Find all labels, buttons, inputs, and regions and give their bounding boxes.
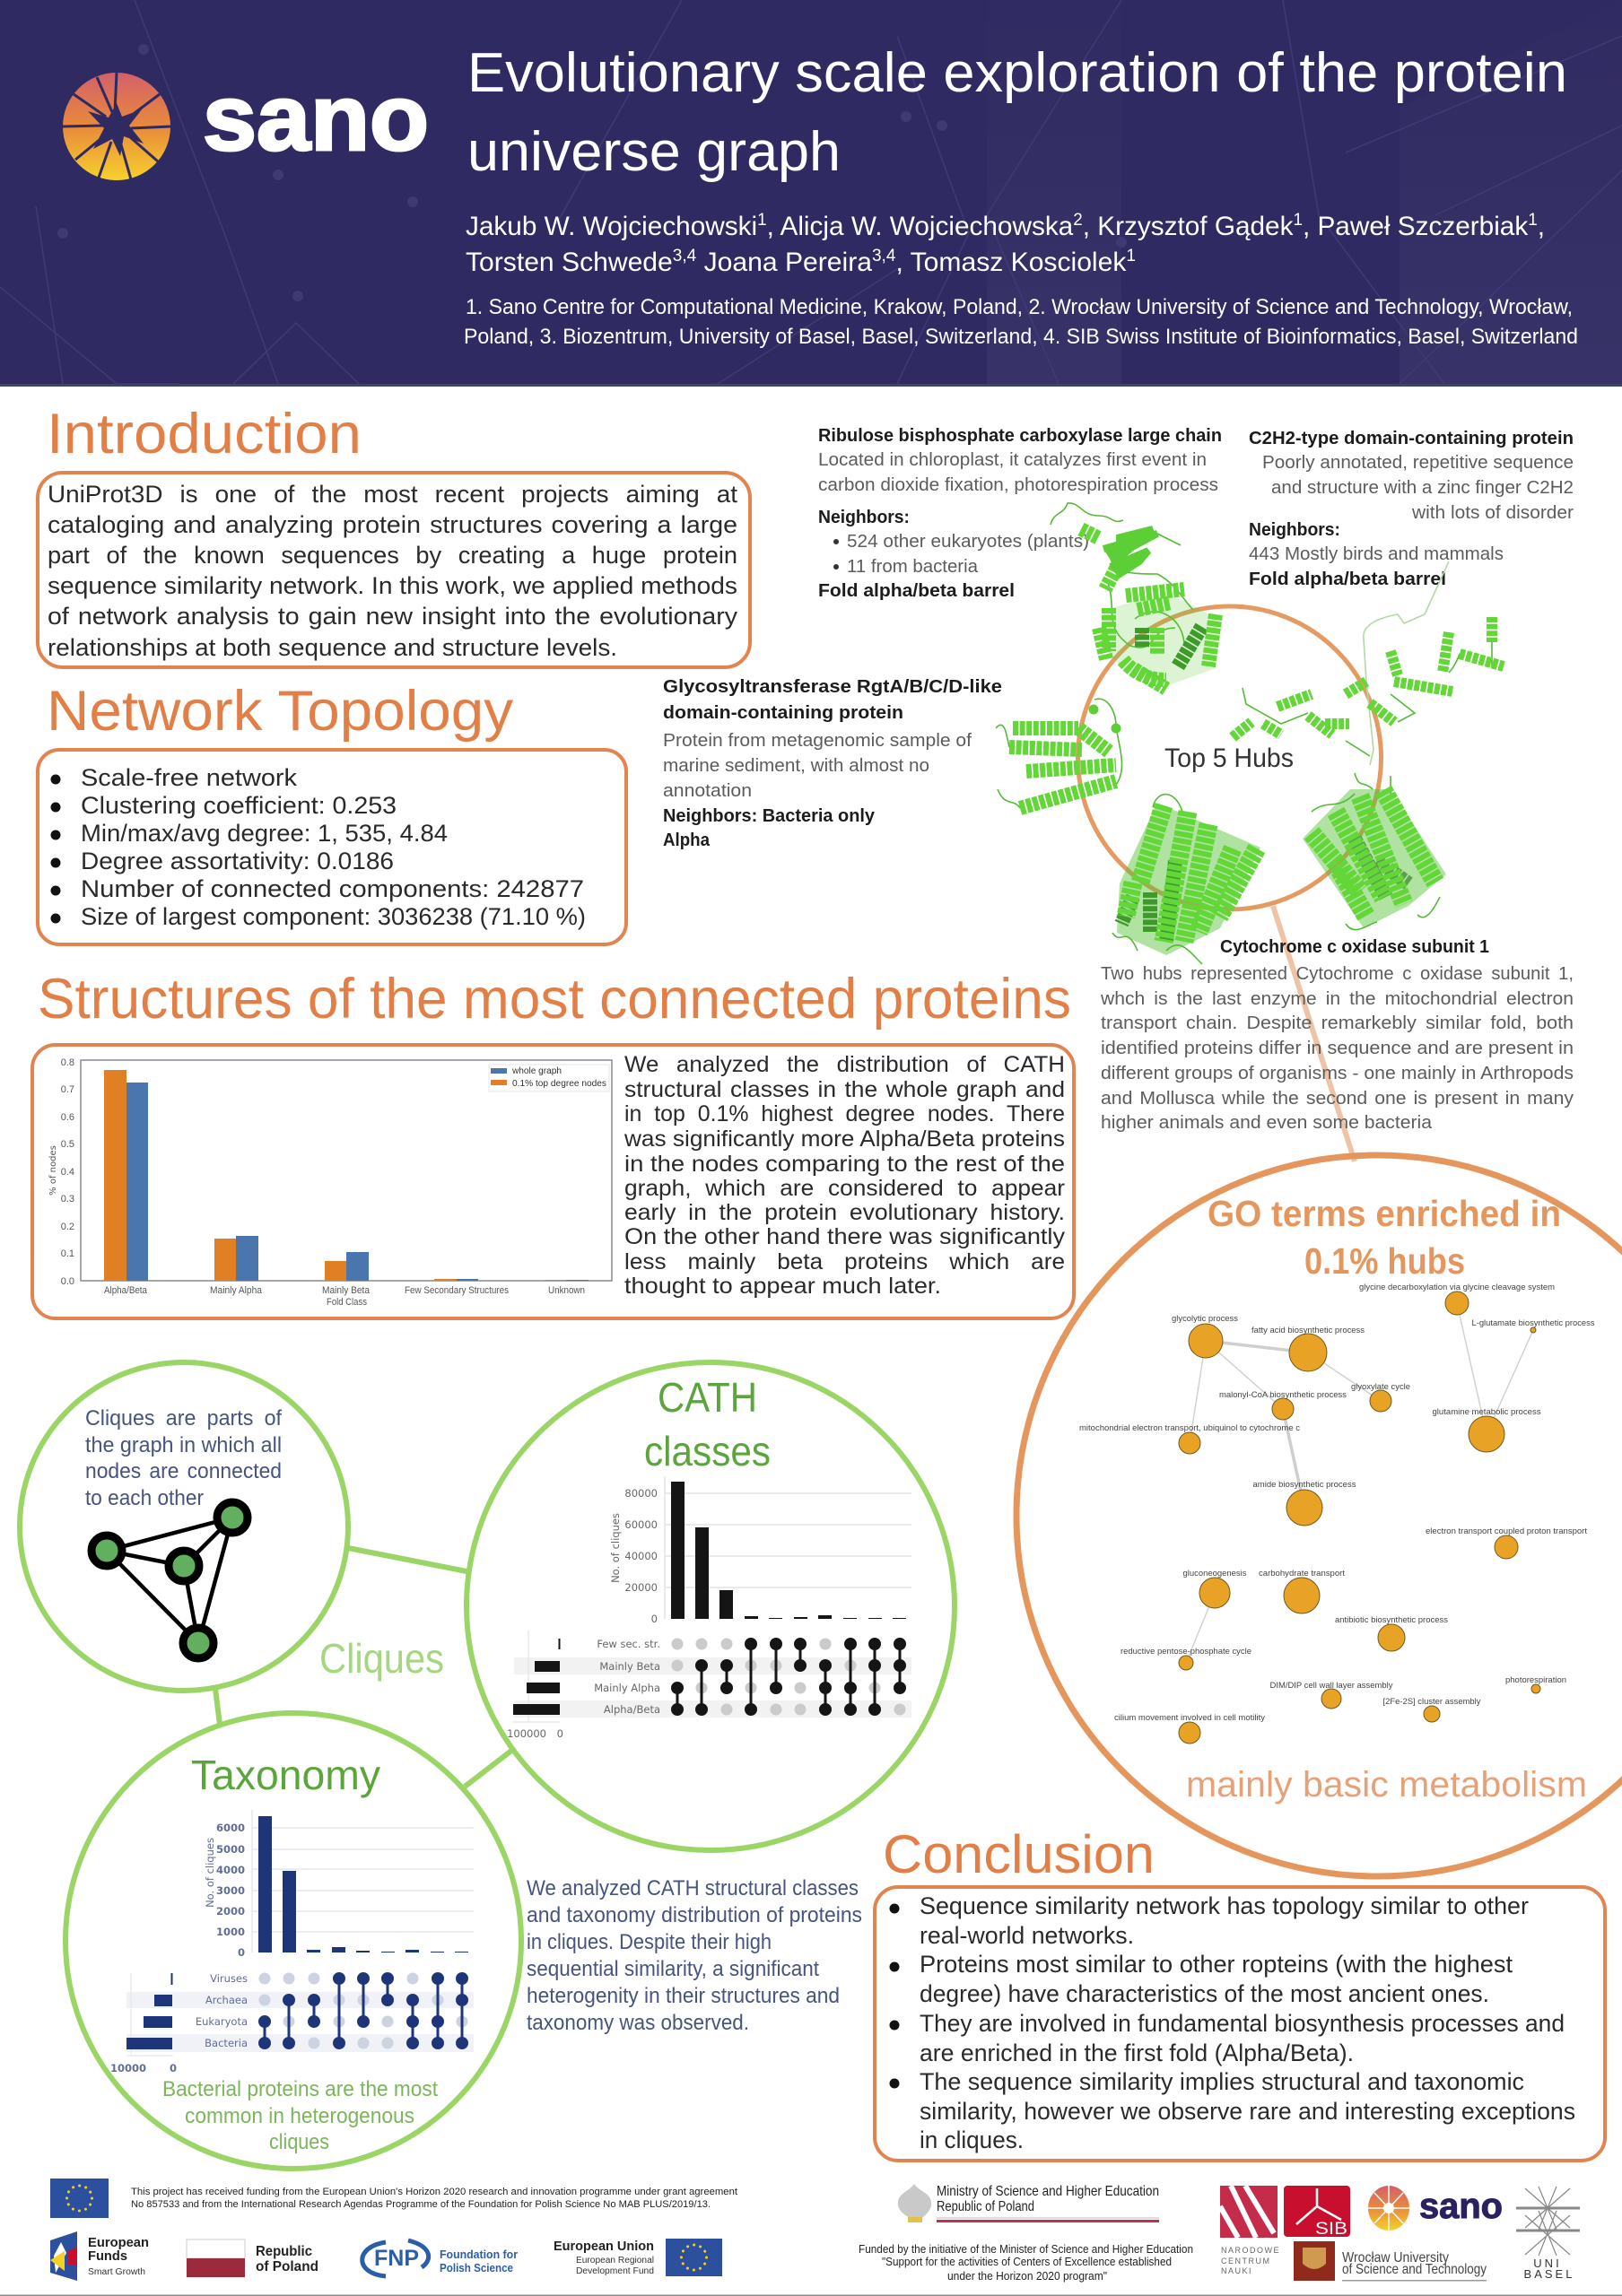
- icon: clique graph: [92, 1502, 248, 1658]
- protein: cytochrome c oxidase 1: [1112, 795, 1260, 964]
- text: Glycosyltransferase description: marine sediment, with almost no: [663, 756, 929, 776]
- text: C2H2 description: and structure with a zinc finger C2H2: [1271, 478, 1574, 498]
- network: GO term nodes: glyoxylate cycle: [1351, 1382, 1410, 1392]
- panel: conclusion: They are involved in fundamental biosynthesis processes and: [920, 2010, 1565, 2037]
- text: Glycosyltransferase description: domain-containing protein: [663, 703, 903, 723]
- text: C2H2 description: C2H2-type domain-containing protein: [1249, 429, 1574, 448]
- logo: sano: sano: [203, 66, 429, 170]
- logo: SIB: [1284, 2186, 1350, 2239]
- logo: European Union: European Union: [554, 2239, 654, 2254]
- bar chart: fold class: [48, 1057, 612, 1308]
- text: funding statement: No 857533 and from the International Research Agendas Programme of the Foundation for Polish Science No MAB PLUS/2019/13.: [131, 2199, 711, 2210]
- logo: sano small: sano: [1419, 2187, 1503, 2226]
- legend: whole graph: [511, 1066, 562, 1076]
- text: clique analysis: taxonomy was observed.: [527, 2011, 749, 2035]
- text: cytochrome c oxidase description: [1100, 937, 1574, 1133]
- circle: cliques definition: to each other: [85, 1486, 204, 1510]
- network: GO term nodes: glutamine metabolic process: [1432, 1407, 1541, 1417]
- legend: [489, 1065, 609, 1091]
- logo: European Funds: [50, 2231, 149, 2281]
- logo: FNP: Foundation for: [440, 2248, 518, 2261]
- text: Funded by statement: Funded by the initiative of the Minister of Science and Higher Education: [859, 2242, 1193, 2256]
- circle: top 5 hubs: [1078, 606, 1382, 909]
- panel: conclusion: are enriched in the first fold (Alpha/Beta).: [920, 2039, 1354, 2066]
- protein: ribulose bisphosphate carboxylase: [1051, 503, 1218, 689]
- text: C2H2 description: Neighbors:: [1249, 520, 1340, 540]
- text: Funded by statement: under the Horizon 2020 program": [947, 2269, 1107, 2283]
- connectors between clique circles: [215, 1548, 511, 1787]
- heading: Network Topology: Network Topology: [47, 680, 514, 743]
- authors: Jakub W. Wojciechowski: [466, 212, 760, 241]
- panel: introduction: [38, 473, 750, 667]
- authors: Joana Pereira: [696, 248, 872, 277]
- heading: Conclusion: Conclusion: [883, 1824, 1155, 1884]
- panel: network topology: Scale-free network: [81, 764, 298, 791]
- upset chart: taxonomy: Viruses: [210, 1972, 248, 1985]
- heading: Structures of the most connected proteins: Structures of the most connected proteins: [38, 968, 1071, 1031]
- affiliations: Poland, 3. Biozentrum, University of Basel, Basel, Switzerland, 4. SIB Swiss Institute of Bioinformatics, Basel, Switzerland: [464, 325, 1578, 349]
- network: GO term nodes: mitochondrial electron transport, ubiquinol to cytochrome c: [1079, 1423, 1300, 1433]
- logo: European Union: European Regional: [576, 2256, 654, 2266]
- text: cytochrome c oxidase description: different groups of organisms - one mainly in Arthropods: [1101, 1064, 1574, 1083]
- text: Glycosyltransferase description: Neighbors: Bacteria only: [663, 806, 876, 826]
- network: GO term nodes: DIM/DIP cell wall layer assembly: [1270, 1681, 1393, 1691]
- logo: Republic of Poland: [187, 2239, 318, 2277]
- network: GO term nodes: carbohydrate transport: [1259, 1569, 1345, 1578]
- logo: FNP: Polish Science: [440, 2261, 513, 2274]
- network: GO term nodes: gluconeogenesis: [1182, 1569, 1247, 1578]
- panel: introduction: relationships at both sequence and structure levels.: [48, 634, 617, 661]
- text: chart explanation: in top 0.1% highest degree nodes. There: [624, 1101, 1065, 1126]
- protein: cytochrome c oxidase 2: [1303, 773, 1446, 930]
- text: chart explanation: early in the protein evolutionary history.: [624, 1200, 1065, 1225]
- affiliations: 1. Sano Centre for Computational Medicine, Krakow, Poland, 2. Wrocław University of Science and Technology, Wrocław,: [466, 295, 1573, 319]
- caption: bacterial proteins: Bacterial proteins are the most: [162, 2077, 438, 2101]
- text: C2H2 description: Poorly annotated, repetitive sequence: [1262, 453, 1574, 473]
- panel: introduction: UniProt3D is one of the most recent projects aiming at: [48, 481, 738, 508]
- text: Glycosyltransferase description: [663, 677, 1002, 850]
- upset chart: taxonomy: 5000: [216, 1843, 245, 1856]
- panel: conclusion: similarity, however we observe rare and interesting exceptions: [920, 2098, 1575, 2125]
- circle: CATH classes: CATH: [658, 1374, 757, 1421]
- network: GO term nodes: electron transport coupled proton transport: [1426, 1526, 1587, 1536]
- panel: conclusion: Sequence similarity network has topology similar to other: [920, 1892, 1529, 1919]
- circle: top 5 hubs: Top 5 Hubs: [1164, 744, 1294, 773]
- authors: , Paweł Szczerbiak: [1303, 212, 1529, 241]
- upset chart: CATH: 20000: [624, 1581, 658, 1594]
- upset chart: CATH: 100000: [507, 1727, 546, 1740]
- title: universe graph: [467, 121, 841, 183]
- text: Glycosyltransferase description: Protein from metagenomic sample of: [663, 731, 972, 751]
- text: funding statement: [131, 2187, 737, 2210]
- upset chart: taxonomy: [110, 1810, 474, 2074]
- network: GO term nodes: [1079, 1283, 1595, 1744]
- connector: hubs to GO terms: [1273, 906, 1355, 1161]
- text: cytochrome c oxidase description: whch is the last enzyme in the mitochondrial electron: [1100, 989, 1574, 1009]
- circle: cliques definition: nodes are connected: [85, 1459, 282, 1483]
- panel: network topology: Clustering coefficient: 0.253: [81, 792, 397, 819]
- authors: 1: [1126, 247, 1136, 265]
- text: chart explanation: was significantly more Alpha/Beta proteins: [624, 1126, 1065, 1152]
- bar chart: fold class: 0.2: [61, 1222, 74, 1232]
- upset chart: taxonomy: Bacteria: [205, 2037, 248, 2049]
- upset chart: taxonomy: 0: [238, 1946, 245, 1959]
- upset chart: CATH: [507, 1476, 911, 1740]
- bar chart: fold class: Alpha/Beta: [104, 1285, 148, 1296]
- authors: 3,4: [673, 247, 697, 265]
- upset chart: taxonomy: 4000: [216, 1864, 245, 1876]
- text: C2H2 description: 443 Mostly birds and mammals: [1249, 544, 1504, 564]
- upset chart: taxonomy: 6000: [216, 1822, 245, 1834]
- logo: Ministry of Science and Higher Education: [898, 2184, 1159, 2222]
- logo: Narodowe Centrum Nauki: CENTRUM: [1221, 2257, 1270, 2266]
- logo: SIB: SIB: [1315, 2220, 1347, 2239]
- logo: FNP: [362, 2240, 518, 2276]
- panel: conclusion: degree) have characteristics of the most ancient ones.: [920, 1980, 1489, 2007]
- authors: , Alicja W. Wojciechowska: [767, 212, 1074, 241]
- text: clique analysis: [527, 1876, 862, 2035]
- panel: introduction: of network analysis to gain new insight into the evolutionary: [48, 603, 738, 630]
- logo: Ministry of Science and Higher Education: Republic of Poland: [937, 2199, 1034, 2214]
- logo: sano small: [1368, 2186, 1503, 2231]
- panel: conclusion: The sequence similarity implies structural and taxonomic: [920, 2068, 1524, 2095]
- text: Ribulose description: 11 from bacteria: [847, 557, 979, 577]
- text: C2H2 description: with lots of disorder: [1411, 503, 1574, 523]
- text: clique analysis: sequential similarity, a significant: [527, 1957, 819, 1981]
- text: cytochrome c oxidase description: transport chain. Despite remarkebly similar fold, both: [1101, 1013, 1574, 1033]
- network: GO term nodes: glycine decarboxylation via glycine cleavage system: [1359, 1283, 1555, 1292]
- bar chart: fold class: 0.6: [61, 1112, 74, 1123]
- text: funding statement: This project has received funding from the European Union's Horizon 2020 research and innovation programme under grant agreement: [131, 2187, 737, 2197]
- circle: cliques definition: Cliques are parts of: [85, 1406, 282, 1431]
- authors: 1: [1293, 211, 1303, 230]
- text: clique analysis: heterogenity in their structures and: [527, 1984, 840, 2008]
- authors: 1: [1528, 211, 1538, 230]
- bar chart: fold class: Mainly Alpha: [210, 1285, 263, 1296]
- text: cytochrome c oxidase description: higher animals and even some bacteria: [1101, 1113, 1433, 1133]
- upset chart: taxonomy: 10000: [110, 2062, 146, 2074]
- network: GO term nodes: [2Fe-2S] cluster assembly: [1383, 1697, 1481, 1707]
- network: GO term nodes: antibiotic biosynthetic process: [1335, 1615, 1448, 1625]
- logo: Narodowe Centrum Nauki: NAUKI: [1221, 2266, 1252, 2275]
- text: clique analysis: and taxonomy distribution of proteins: [527, 1903, 862, 1927]
- caption: bacterial proteins: cliques: [269, 2130, 329, 2154]
- upset chart: CATH: Mainly Alpha: [594, 1682, 660, 1694]
- text: chart explanation: We analyzed the distribution of CATH: [624, 1052, 1065, 1077]
- logo: Uni Basel: [1516, 2187, 1580, 2281]
- icon: sano sun: [63, 73, 170, 180]
- network: GO term nodes: photorespiration: [1505, 1675, 1566, 1685]
- bar chart: fold class: Unknown: [548, 1285, 585, 1296]
- circle: CATH classes: classes: [644, 1428, 771, 1474]
- text: Ribulose description: Ribulose bisphosphate carboxylase large chain: [818, 426, 1222, 446]
- panel: network topology: [38, 750, 626, 944]
- upset chart: CATH: 0: [651, 1613, 658, 1625]
- network: GO term nodes: malonyl-CoA biosynthetic process: [1219, 1390, 1347, 1400]
- text: C2H2 description: [1249, 429, 1574, 589]
- circle: GO terms enriched: 0.1% hubs: [1304, 1240, 1465, 1282]
- authors: 3,4: [872, 247, 896, 265]
- logo: European Union: [554, 2239, 722, 2276]
- upset chart: taxonomy: 3000: [216, 1884, 245, 1897]
- panel: network topology: Degree assortativity: 0.0186: [81, 848, 394, 874]
- logo: Narodowe Centrum Nauki: NARODOWE: [1221, 2246, 1280, 2255]
- protein: C2H2 domain: [1233, 561, 1504, 765]
- text: Ribulose description: Located in chloroplast, it catalyzes first event in: [818, 450, 1207, 470]
- panel: conclusion: [875, 1887, 1605, 2161]
- panel: conclusion: real-world networks.: [920, 1922, 1134, 1949]
- logo: Wroclaw University: of Science and Technology: [1342, 2262, 1487, 2277]
- logo: Wroclaw University: [1294, 2241, 1487, 2282]
- network: GO term nodes: amide biosynthetic process: [1252, 1480, 1356, 1490]
- logo: European Funds: European: [88, 2235, 149, 2250]
- circle: GO terms enriched: mainly basic metabolism: [1186, 1765, 1587, 1805]
- bar chart: fold class: 0.3: [61, 1194, 74, 1205]
- upset chart: CATH: No. of cliques: [609, 1513, 622, 1583]
- text: Ribulose description: Neighbors:: [818, 508, 910, 527]
- circle: GO terms enriched: GO terms enriched in: [1208, 1193, 1561, 1234]
- caption: bacterial proteins: common in heterogenous: [185, 2104, 414, 2128]
- authors: Torsten Schwede: [466, 248, 672, 277]
- legend: 0.1% top degree nodes: [512, 1079, 606, 1089]
- logo: Uni Basel: UNI: [1533, 2257, 1562, 2270]
- bar chart: fold class: 0.1: [61, 1248, 74, 1259]
- bar chart: fold class: 0.7: [61, 1084, 74, 1095]
- logo: European Funds: Smart Growth: [88, 2267, 145, 2277]
- circle: cliques definition: [20, 1362, 348, 1691]
- text: clique analysis: We analyzed CATH structural classes: [527, 1876, 859, 1900]
- authors: 2: [1073, 211, 1083, 230]
- circle: GO terms enriched: [1016, 1155, 1622, 1876]
- circle: CATH classes: [467, 1362, 955, 1850]
- bar chart: fold class: Fold Class: [327, 1297, 367, 1308]
- upset chart: CATH: Mainly Beta: [599, 1660, 660, 1673]
- upset chart: CATH: 80000: [624, 1487, 658, 1500]
- upset chart: taxonomy: Eukaryota: [196, 2015, 248, 2028]
- text: C2H2 description: Fold alpha/beta barrel: [1249, 570, 1446, 589]
- logo: Narodowe Centrum Nauki: [1220, 2186, 1280, 2275]
- text: chart explanation: graph, which are considered to appear: [624, 1176, 1065, 1201]
- icon: EU flag: [50, 2179, 109, 2218]
- text: chart explanation: thought to appear much later.: [624, 1274, 941, 1299]
- upset chart: taxonomy: No. of cliques: [204, 1838, 216, 1908]
- text: chart explanation: On the other hand there was significantly: [624, 1224, 1066, 1249]
- text: chart explanation: in the nodes comparing to the rest of the: [624, 1152, 1065, 1177]
- text: Ribulose description: Fold alpha/beta barrel: [818, 581, 1015, 601]
- logo: Uni Basel: BASEL: [1524, 2267, 1574, 2281]
- panel: introduction: sequence similarity network. In this work, we applied methods: [48, 572, 737, 599]
- panel: conclusion: Proteins most similar to other ropteins (with the highest: [920, 1951, 1513, 1978]
- logo: European Funds: Funds: [88, 2248, 127, 2264]
- text: Glycosyltransferase description: Glycosyltransferase RgtA/B/C/D-like: [663, 677, 1002, 697]
- authors: 1: [757, 211, 767, 230]
- logo: Republic of Poland: of Poland: [256, 2259, 318, 2274]
- bar chart: fold class: 0.5: [61, 1139, 74, 1150]
- circle: cliques definition: the graph in which all: [85, 1433, 282, 1457]
- title: Evolutionary scale exploration of the protein: [467, 42, 1567, 104]
- bar chart: fold class: % of nodes: [48, 1145, 58, 1196]
- panel: introduction: part of the known sequences by creating a huge protein: [48, 542, 737, 569]
- network: GO term nodes: L-glutamate biosynthetic process: [1471, 1318, 1595, 1328]
- text: cytochrome c oxidase description: Two hubs represented Cytochrome c oxidase subunit 1,: [1101, 964, 1574, 984]
- text: Ribulose description: carbon dioxide fixation, photorespiration process: [818, 475, 1218, 495]
- text: chart explanation: less mainly beta proteins which are: [624, 1249, 1065, 1274]
- label: Cliques: Cliques: [319, 1635, 444, 1682]
- panel: network topology: Number of connected components: 242877: [81, 875, 584, 902]
- circle: Taxonomy: [65, 1713, 521, 2169]
- text: chart explanation: structural classes in the whole graph and: [624, 1077, 1065, 1102]
- text: clique analysis: in cliques. Despite their high: [527, 1930, 772, 1954]
- protein: glycosyltransferase: [996, 699, 1122, 808]
- bar chart: fold class: Mainly Beta: [322, 1285, 371, 1296]
- text: Ribulose description: [818, 426, 1222, 601]
- logo: Wroclaw University: Wrocław University: [1342, 2250, 1449, 2266]
- bar chart: fold class: 0.8: [61, 1057, 74, 1068]
- network: GO term nodes: glycolytic process: [1172, 1314, 1238, 1324]
- text: Funded by statement: [859, 2242, 1193, 2283]
- text: cytochrome c oxidase description: Cytochrome c oxidase subunit 1: [1220, 937, 1489, 957]
- logo: sano: [63, 66, 429, 180]
- upset chart: CATH: 40000: [624, 1550, 658, 1562]
- circle: Taxonomy: Taxonomy: [191, 1752, 380, 1798]
- logo: European Union: Development Fund: [576, 2266, 654, 2276]
- title: [467, 42, 1567, 183]
- panel: introduction: cataloging and analyzing protein structures covering a large: [48, 511, 737, 538]
- text: cytochrome c oxidase description: identified proteins differ in sequence and are present in: [1101, 1039, 1574, 1058]
- heading: Introduction: Introduction: [47, 403, 362, 465]
- network: GO term nodes: cilium movement involved in cell motility: [1114, 1713, 1265, 1723]
- bar chart: fold class: Few Secondary Structures: [405, 1285, 509, 1296]
- bar chart: fold class: 0.0: [61, 1276, 74, 1287]
- upset chart: taxonomy: Archaea: [205, 1994, 248, 2006]
- header banner: [0, 0, 1622, 387]
- bar chart: fold class: 0.4: [61, 1167, 74, 1178]
- panel: CATH class distribution: [32, 1045, 1074, 1318]
- upset chart: CATH: 0: [557, 1727, 563, 1740]
- bottom edge strip: [0, 2294, 1622, 2296]
- upset chart: CATH: 60000: [624, 1518, 658, 1531]
- text: Glycosyltransferase description: annotation: [663, 781, 752, 801]
- upset chart: taxonomy: 1000: [216, 1926, 245, 1938]
- text: chart explanation: [624, 1052, 1066, 1299]
- upset chart: CATH: Few sec. str.: [597, 1638, 660, 1650]
- panel: network topology: Size of largest component: 3036238 (71.10 %): [81, 903, 586, 930]
- affiliations: [464, 295, 1578, 349]
- network: GO term nodes: fatty acid biosynthetic process: [1251, 1326, 1365, 1335]
- authors: [466, 211, 1545, 277]
- upset chart: taxonomy: 0: [170, 2062, 177, 2074]
- logo: FNP: FNP: [374, 2246, 419, 2271]
- panel: conclusion: in cliques.: [920, 2126, 1024, 2153]
- authors: , Krzysztof Gądek: [1083, 212, 1294, 241]
- text: Glycosyltransferase description: Alpha: [663, 831, 711, 850]
- upset chart: CATH: Alpha/Beta: [604, 1703, 660, 1716]
- upset chart: taxonomy: 2000: [216, 1905, 245, 1918]
- authors: ,: [1538, 212, 1545, 241]
- caption: bacterial proteins: [162, 2077, 438, 2154]
- logo: Ministry of Science and Higher Education: Ministry of Science and Higher Education: [937, 2184, 1159, 2199]
- text: cytochrome c oxidase description: and Mollusca while the second one is present in many: [1101, 1089, 1574, 1109]
- text: Funded by statement: "Support for the activities of Centers of Excellence established: [882, 2255, 1172, 2268]
- logo: Republic of Poland: Republic: [256, 2244, 312, 2259]
- panel: network topology: Min/max/avg degree: 1, 535, 4.84: [81, 820, 448, 847]
- authors: , Tomasz Kosciolek: [895, 248, 1127, 277]
- text: Ribulose description: 524 other eukaryotes (plants): [847, 532, 1089, 552]
- network: GO term nodes: reductive pentose-phosphate cycle: [1121, 1647, 1251, 1657]
